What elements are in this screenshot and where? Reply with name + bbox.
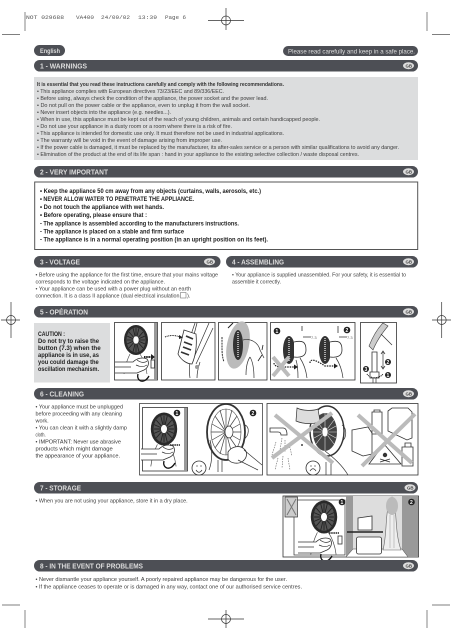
text: problems: • If the appliance ceases to operate or is damaged in any way, contact one of our authorised service centres. — [36, 584, 302, 590]
text: voltage: • Before using the appliance for the first time, ensure that your mains voltage — [36, 273, 218, 279]
callout: caution — [34, 323, 110, 382]
illustration: raising the button: 7.3 — [311, 335, 317, 340]
heading: 3 voltage — [34, 256, 220, 268]
callout: caution: CAUTION : — [38, 332, 65, 338]
heading: 4 assembling: GB — [406, 259, 412, 264]
illustration: raising the button: 1 — [276, 329, 278, 335]
heading: 1 warnings: 1 - WARNINGS — [40, 62, 87, 70]
text: cleaning: the appearance of your appliance. — [36, 453, 120, 459]
heading: 2 very important: GB — [406, 169, 412, 174]
panel: warnings: • Never insert objects into the appliance (e.g. needles...). — [37, 110, 171, 116]
illustration: cleaning steps 1 and 2: 1 — [176, 411, 178, 417]
crop marks and print header: 13:39 — [138, 14, 157, 21]
text: assembling: • Your appliance is supplied unassembled. For your safety, it is essential to — [232, 273, 406, 279]
heading: 8 problems — [34, 560, 418, 572]
heading: 6 cleaning — [34, 388, 418, 400]
heading: 4 assembling — [226, 256, 418, 268]
illustration: raising the button: 2 — [346, 328, 348, 334]
safety note pill: Please read carefully and keep in a safe place. — [288, 48, 415, 56]
illustration: cleaning steps 1 and 2: 2 — [252, 411, 254, 417]
text: cleaning: work. — [35, 418, 49, 424]
text: problems — [36, 577, 302, 590]
text: voltage — [36, 273, 218, 300]
illustration: raising the button: 7.3 — [347, 335, 353, 340]
crop marks and print header: VA400 — [76, 14, 95, 21]
crop marks and print header: 24/09/02 — [101, 14, 130, 21]
panel: very important — [35, 182, 418, 250]
illustration: storage — [283, 496, 418, 561]
panel: very important: - The appliance is in a normal operating position (in an upright position on its feet). — [40, 238, 268, 244]
heading: 8 problems: GB — [406, 563, 412, 568]
illustration: oscillation — [218, 319, 267, 380]
callout: caution: appliance is in use, as — [38, 353, 100, 359]
text: voltage: connection. It is a class II appliance (dual electrical insulation — [36, 294, 180, 300]
panel: warnings: • Do not pull on the power cable or the appliance, even to unplug it from the wall socket. — [37, 103, 250, 109]
text: voltage: • Your appliance can be used with a power plug without an earth — [36, 287, 191, 293]
panel: warnings: • This appliance complies with European directives 73/23/EEC and 89/336/EEC. — [37, 89, 224, 95]
heading: 6 cleaning: GB — [406, 391, 412, 396]
text: voltage: ). — [187, 294, 191, 300]
illustration: storage: 1 — [340, 500, 344, 506]
panel: warnings: • Do not use your appliance in a dusty room or a room where there is a risk of fire. — [37, 124, 232, 130]
heading: 2 very important — [34, 166, 418, 178]
language badge — [34, 45, 65, 56]
heading: 3 voltage: 3 - VOLTAGE — [40, 258, 80, 266]
illustration: assembly of the stand: 3 — [364, 367, 368, 373]
panel: very important: • NEVER ALLOW WATER TO PENETRATE THE APPLIANCE. — [40, 197, 194, 203]
text: cleaning: • Your appliance must be unplugged — [36, 405, 123, 411]
panel: very important: • Before operating, please ensure that : — [40, 213, 147, 219]
text: cleaning: before proceeding with any cleaning — [36, 412, 122, 418]
illustration: unplug the fan — [114, 322, 158, 381]
illustration: assembly of the stand: 2 — [386, 360, 390, 366]
panel: warnings — [34, 77, 418, 160]
heading: 4 assembling: 4 - ASSEMBLING — [232, 258, 284, 266]
heading: 7 storage — [34, 482, 418, 494]
text: cleaning: • IMPORTANT: Never use abrasive — [36, 440, 121, 446]
heading: 8 problems: 8 - IN THE EVENT OF PROBLEMS — [40, 562, 143, 570]
panel: warnings: • When in use, this appliance must be kept out of the reach of young children, animals and certain handicapped people. — [37, 117, 320, 123]
illustration: do not wet or use chemicals — [267, 404, 418, 475]
panel: warnings: It is essential that you read these instructions carefully and comply with the following recommendations. — [37, 82, 284, 88]
crop marks and print header: Page 6 — [165, 14, 186, 21]
panel: very important: - The appliance is placed on a stable and firm surface — [40, 229, 185, 235]
panel: very important: • Do not touch the appliance with wet hands. — [40, 205, 164, 211]
illustration: raising the button — [270, 322, 355, 380]
panel: very important: - The appliance is assembled according to the manufacturers instructions. — [40, 221, 239, 227]
text: assembling — [232, 273, 406, 286]
illustration: assembly of the stand: 1 — [386, 373, 390, 379]
heading: 7 storage: 7 - STORAGE — [40, 484, 81, 492]
heading: 2 very important: 2 - VERY IMPORTANT — [40, 168, 109, 176]
panel: warnings: • Before using, always check the condition of the appliance, the power socket and the power lead. — [37, 96, 268, 102]
safety note pill — [283, 46, 418, 56]
callout: caution: oscillation mechanism. — [38, 367, 99, 373]
callout: caution: button (7.3) when the — [38, 346, 101, 352]
illustration: assembly of the stand — [360, 322, 396, 383]
panel: warnings: • This appliance is intended for domestic use only. It must therefore not be used in industrial applications. — [37, 131, 284, 137]
panel: warnings: • If the power cable is damaged, it must be replaced by the manufacturer, its after-sales service or a person with similar qualifications to avoid any danger. — [37, 145, 399, 151]
text: storage: • When you are not using your appliance, store it in a dry place. — [36, 499, 188, 505]
callout: caution: Do not try to raise the — [38, 339, 100, 345]
illustration: cleaning steps 1 and 2 — [140, 404, 262, 475]
illustration: control panel — [162, 322, 215, 380]
heading: 7 storage: GB — [407, 485, 414, 490]
illustration: storage: 2 — [410, 500, 413, 506]
heading: 5 operation: 5 - OPÉRATION — [40, 308, 88, 316]
panel: warnings: • The warranty will be void in the event of damage arising from improper use. — [37, 138, 222, 144]
heading: 3 voltage: GB — [206, 259, 213, 264]
text: assembling: assemble it correctly. — [232, 280, 281, 286]
text: cleaning — [35, 405, 127, 459]
panel: very important: • Keep the appliance 50 cm away from any objects (curtains, walls, aerosols, etc.) — [40, 189, 261, 195]
text: cleaning: cloth. — [36, 432, 46, 438]
heading: 5 operation: GB — [406, 309, 412, 314]
callout: caution: you could damage the — [38, 360, 99, 366]
heading: 1 warnings: GB — [406, 63, 412, 68]
text: problems: • Never dismantle your appliance yourself. A poorly repaired appliance may be dangerous for the user. — [36, 577, 287, 583]
crop marks and print header: NOT 029688 — [26, 14, 64, 21]
text: voltage: corresponds to the voltage indicated on the appliance. — [36, 280, 165, 286]
panel: warnings: • Elimination of the product at the end of its life span : hand in your appliance to the existing selective collection / waste disposal centres. — [37, 152, 359, 158]
heading: 1 warnings — [34, 60, 418, 72]
text: cleaning: • You can clean it with a slightly damp — [36, 426, 127, 432]
language badge: English — [40, 48, 60, 55]
heading: 6 cleaning: 6 - CLEANING — [40, 390, 84, 398]
text: cleaning: products which might damage — [36, 446, 113, 452]
heading: 5 operation — [34, 306, 418, 318]
